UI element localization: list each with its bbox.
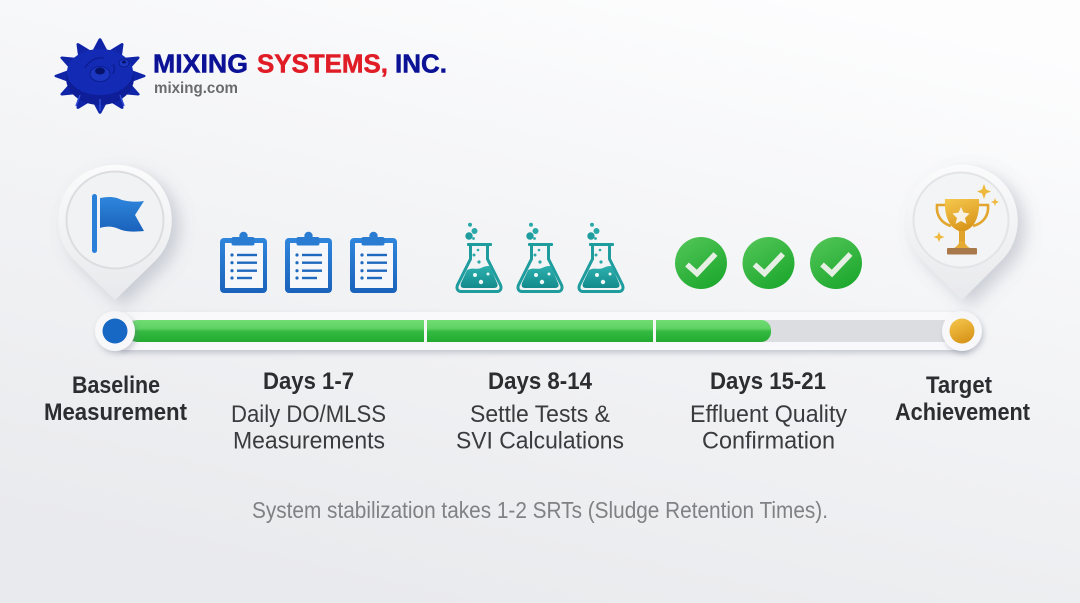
icon: blue gear <box>56 39 144 113</box>
progress track <box>118 312 968 350</box>
green progress fill <box>128 320 771 342</box>
icon: flask 3 <box>579 223 623 292</box>
label: baseline measurement <box>44 372 187 426</box>
logo: Mixing Systems, Inc. <box>56 39 447 113</box>
icon: check 1 <box>675 237 727 289</box>
icons: clipboards <box>220 232 397 293</box>
label: days 15-21: Confirmation <box>702 428 835 454</box>
pin: target trophy <box>906 165 1018 300</box>
icon: blue flag <box>92 194 144 253</box>
label: days 8-14: SVI Calculations <box>456 428 624 454</box>
label: days 15-21 <box>690 368 848 454</box>
label: days 15-21: Effluent Quality <box>690 401 848 428</box>
label: baseline measurement: Baseline <box>72 372 160 399</box>
icon: clipboard 3 <box>350 232 397 293</box>
icons: flasks <box>457 223 623 292</box>
pin: baseline flag <box>58 165 172 300</box>
label: days 8-14: Days 8-14 <box>488 368 592 395</box>
label: target achievement: Achievement <box>895 399 1030 426</box>
logo wordmark: SYSTEMS, <box>257 50 388 78</box>
icons: check marks <box>675 237 862 289</box>
logo url: mixing.com <box>154 80 238 97</box>
start node <box>95 311 135 351</box>
label: target achievement <box>895 372 1030 426</box>
icon: clipboard 1 <box>220 232 267 293</box>
label: days 8-14: Settle Tests & <box>470 401 610 428</box>
end node <box>942 311 982 351</box>
label: days 1-7: Daily DO/MLSS <box>231 401 386 428</box>
logo wordmark: INC. <box>395 50 447 78</box>
label: days 15-21: Days 15-21 <box>710 368 826 395</box>
icon: flask 2 <box>518 223 562 292</box>
label: days 8-14 <box>456 368 624 454</box>
footnote: System stabilization takes 1-2 SRTs (Sludge Retention Times). <box>252 497 828 523</box>
label: baseline measurement: Measurement <box>44 399 187 426</box>
label: days 1-7: Measurements <box>233 428 385 454</box>
icon: gold trophy <box>934 184 999 254</box>
label: days 1-7 <box>231 368 386 454</box>
icon: clipboard 2 <box>285 232 332 293</box>
icon: flask 1 <box>457 223 501 292</box>
logo wordmark: MIXING <box>153 50 248 78</box>
label: days 1-7: Days 1-7 <box>263 368 354 395</box>
icon: check 3 <box>810 237 862 289</box>
label: target achievement: Target <box>926 372 992 399</box>
icon: check 2 <box>742 237 794 289</box>
